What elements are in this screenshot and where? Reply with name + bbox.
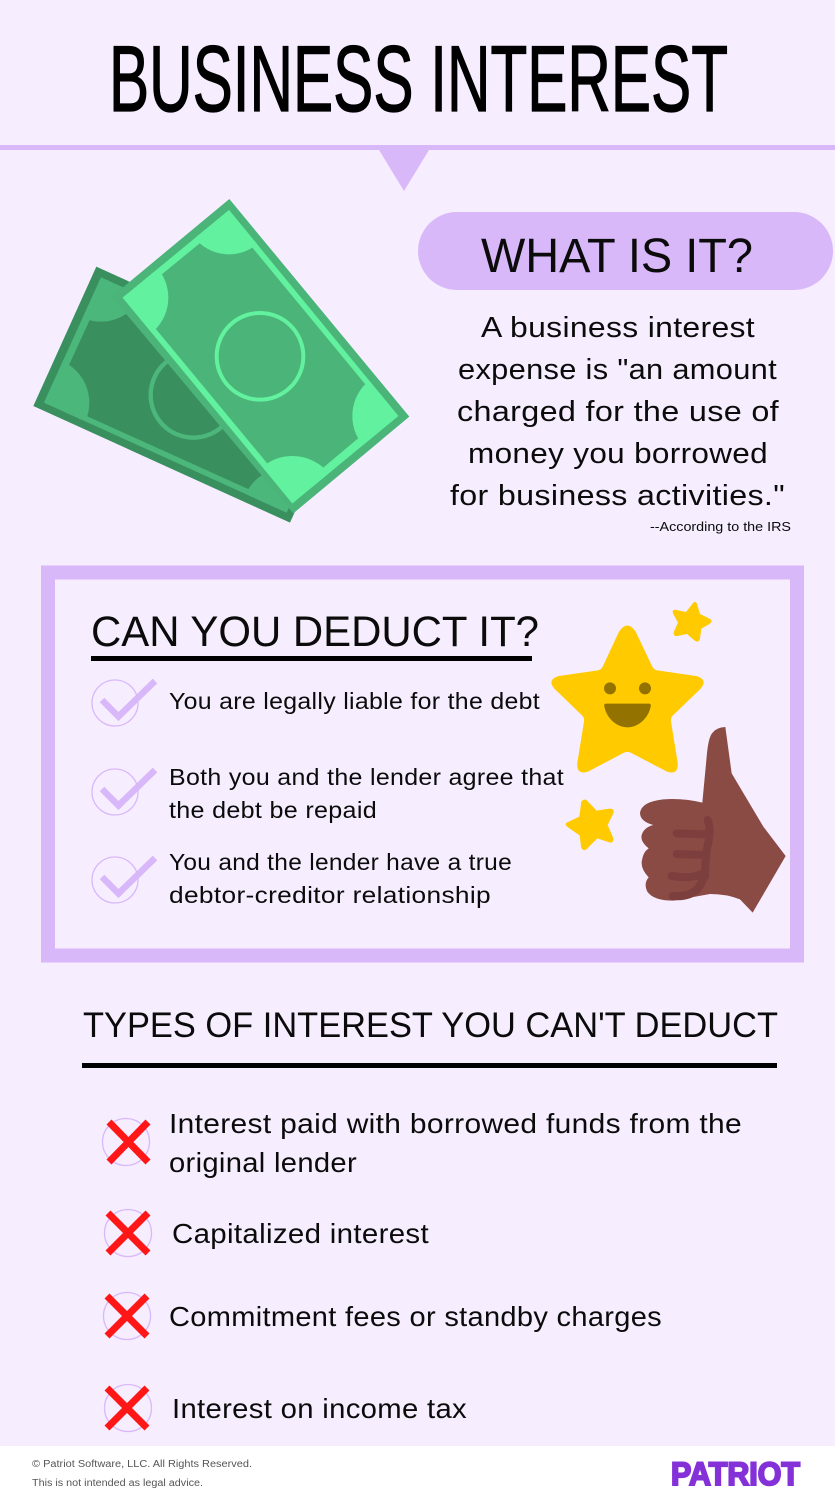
heading: [82, 1005, 778, 1068]
icon: stars and thumbs up: [551, 602, 786, 913]
item: agree debt be repaid: Both you and the lender agree that: [169, 764, 564, 790]
heading pill: WHAT IS IT?: [481, 230, 753, 283]
big smiling star: [551, 625, 704, 772]
definition text: for business activities.": [450, 480, 785, 512]
small star bottom: [566, 799, 614, 850]
definition text: A business interest: [481, 312, 755, 344]
item: borrowed funds: original lender: [169, 1147, 357, 1178]
icon: money bills: [33, 199, 410, 523]
copyright text: © Patriot Software, LLC. All Rights Reserved.: [32, 1459, 252, 1470]
item: legally liable: You are legally liable for the debt: [169, 688, 540, 714]
item: income tax: Interest on income tax: [172, 1393, 467, 1424]
panel: types of interest you can't deduct: [82, 1005, 778, 1432]
item: agree debt be repaid: [92, 764, 564, 823]
arrow: pointer below title: [379, 150, 429, 191]
item: borrowed funds: Interest paid with borrowed funds from the: [169, 1108, 742, 1139]
copyright text: This is not intended as legal advice.: [32, 1478, 203, 1489]
panel: can you deduct it: [48, 572, 797, 956]
definition text: [450, 312, 785, 512]
definition text: money you borrowed: [468, 438, 768, 470]
small star top: [673, 602, 712, 642]
footer: [0, 1446, 835, 1500]
item: commitment fees: Commitment fees or standby charges: [169, 1301, 662, 1332]
item: capitalized interest: Capitalized interest: [172, 1218, 429, 1249]
definition text: expense is "an amount: [458, 354, 777, 386]
item: debtor-creditor relationship: debtor-creditor relationship: [169, 882, 491, 908]
item: debtor-creditor relationship: You and the lender have a true: [169, 849, 512, 875]
back bill: [33, 266, 295, 523]
panel: what is it: [418, 212, 833, 534]
item: income tax: [104, 1384, 467, 1432]
definition text: charged for the use of: [457, 396, 780, 428]
item: commitment fees: [104, 1292, 662, 1340]
item: debtor-creditor relationship: [92, 849, 512, 908]
heading: CAN YOU DEDUCT IT?: [91, 608, 539, 656]
item: capitalized interest: [104, 1210, 429, 1256]
item: borrowed funds: [102, 1108, 742, 1178]
item: agree debt be repaid: the debt be repaid: [169, 797, 377, 823]
copyright text: [32, 1459, 252, 1489]
heading pill: [418, 212, 833, 290]
thumbs up hand: [640, 727, 786, 913]
front bill: [122, 199, 410, 514]
heading: TYPES OF INTEREST YOU CAN'T DEDUCT: [83, 1005, 778, 1045]
item: legally liable: [92, 680, 540, 726]
source note: --According to the IRS: [650, 519, 791, 534]
logo: Patriot: PATRIOT: [671, 1456, 800, 1492]
